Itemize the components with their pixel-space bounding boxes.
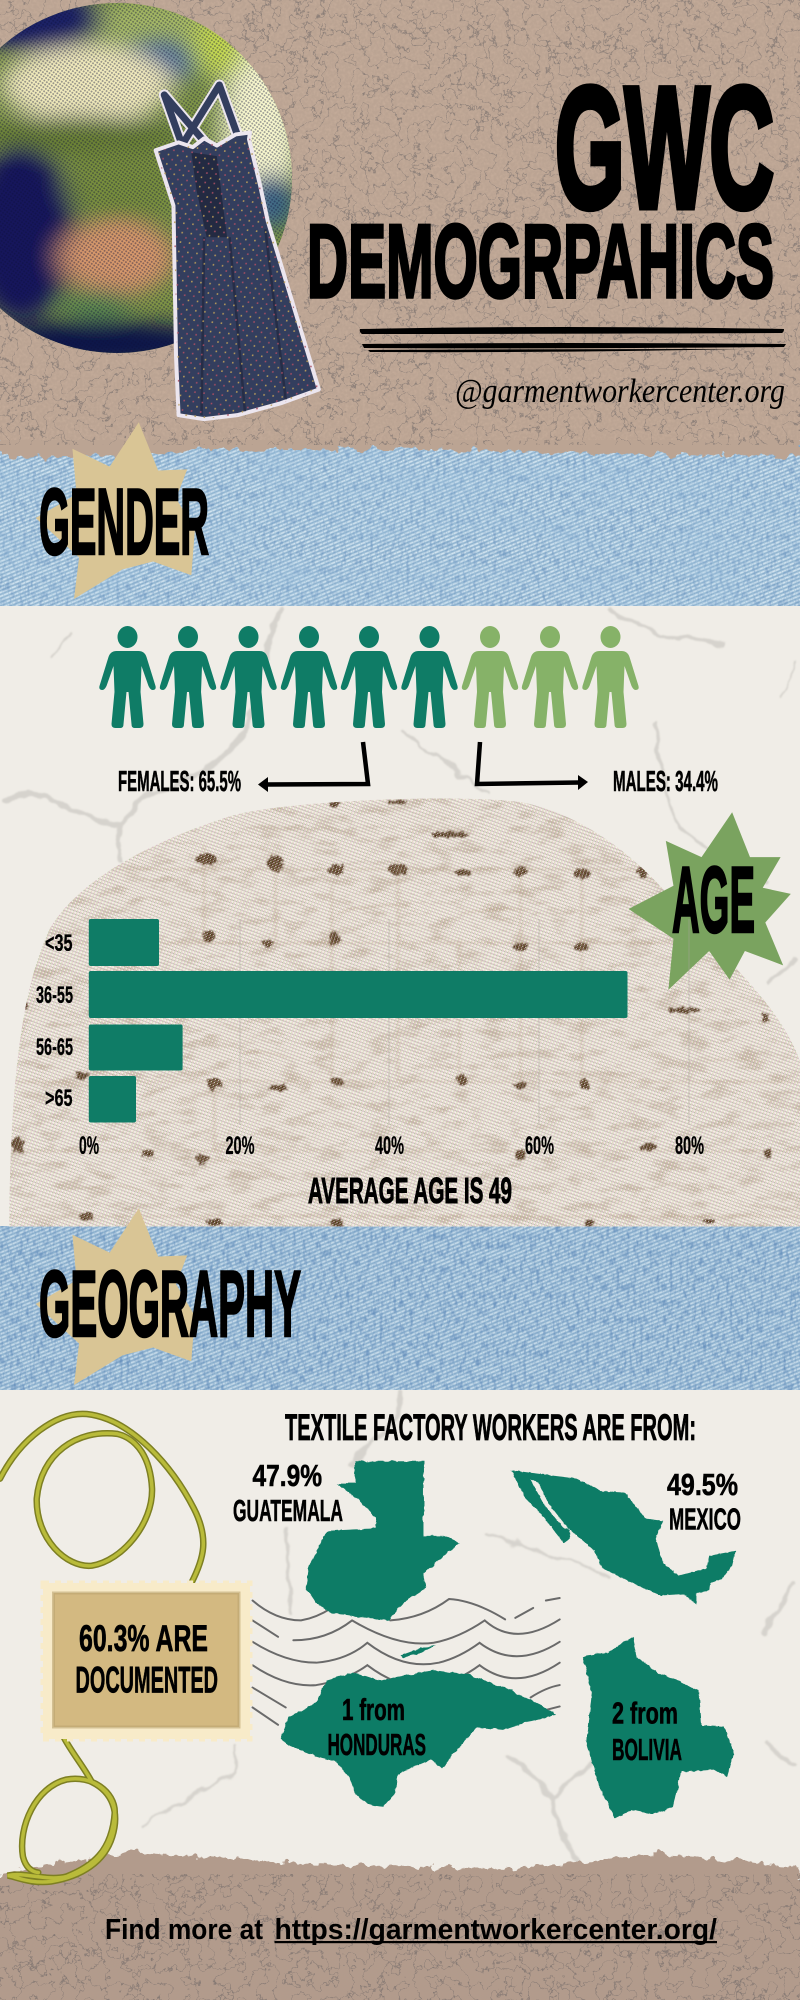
panel: denim band gender bbox=[0, 440, 800, 606]
stamp: documented: 60.3% ARE bbox=[79, 1618, 208, 1659]
decorative postmark wave lines bbox=[253, 1598, 560, 1725]
icon: green starburst bbox=[629, 812, 791, 990]
text: GENDER bbox=[39, 469, 209, 574]
label: guatemala bbox=[233, 1458, 343, 1528]
category labels: 56-65 bbox=[36, 1034, 73, 1061]
axis labels: 80% bbox=[675, 1132, 704, 1160]
icon: tan starburst behind gender bbox=[36, 422, 195, 599]
label: honduras bbox=[328, 1692, 426, 1762]
category labels: <35 bbox=[45, 930, 72, 957]
stamp: documented bbox=[43, 1583, 250, 1739]
label: females: FEMALES: 65.5% bbox=[118, 766, 241, 798]
label: bolivia: BOLIVIA bbox=[612, 1732, 682, 1767]
decorative brush underline bbox=[360, 327, 786, 352]
axis labels: 60% bbox=[525, 1132, 554, 1160]
title bbox=[307, 52, 774, 320]
label: bolivia bbox=[612, 1696, 682, 1767]
image: halftone globe bbox=[0, 0, 301, 368]
arrow: females bbox=[258, 742, 368, 792]
label: mexico bbox=[667, 1467, 741, 1536]
text: GEOGRAPHY bbox=[39, 1251, 301, 1356]
bars bbox=[89, 919, 628, 1122]
footer: link: Find more at bbox=[105, 1914, 263, 1946]
heading: age bbox=[629, 812, 791, 990]
category labels: >65 bbox=[45, 1085, 72, 1112]
panel: denim band geography bbox=[0, 1226, 800, 1390]
axis labels bbox=[79, 1132, 704, 1160]
label: mexico: MEXICO bbox=[669, 1502, 741, 1536]
map: bolivia bbox=[583, 1637, 734, 1818]
icon: tan starburst behind geography bbox=[36, 1208, 195, 1385]
label: honduras: HONDURAS bbox=[328, 1727, 426, 1762]
map: guatemala bbox=[306, 1461, 459, 1620]
image: navy dress bbox=[156, 85, 319, 419]
map: mexico bbox=[511, 1470, 736, 1604]
callout: average age: AVERAGE AGE IS 49 bbox=[308, 1170, 512, 1211]
axis labels: 0% bbox=[79, 1132, 99, 1160]
label: mexico: 49.5% bbox=[667, 1467, 738, 1502]
stamp: documented: DOCUMENTED bbox=[76, 1660, 218, 1700]
chart: age bar chart bbox=[36, 919, 704, 1160]
axis labels: 40% bbox=[375, 1132, 404, 1160]
axis labels: 20% bbox=[226, 1132, 254, 1160]
category labels: 36-55 bbox=[36, 982, 73, 1009]
decorative green string bbox=[0, 1414, 203, 1882]
arrow: males bbox=[477, 742, 588, 790]
footer: link: https://garmentworkercenter.org/ bbox=[274, 1914, 717, 1946]
background: bottom torn kraft paper bbox=[0, 1852, 800, 2000]
label: guatemala: 47.9% bbox=[252, 1458, 322, 1493]
chart: gender pictogram of nine people bbox=[99, 626, 639, 728]
label: bolivia: 2 from bbox=[612, 1696, 678, 1730]
label: guatemala: GUATEMALA bbox=[233, 1493, 343, 1528]
category labels bbox=[36, 930, 73, 1112]
map: honduras bbox=[281, 1645, 556, 1807]
background: top torn kraft paper bbox=[0, 0, 800, 458]
panel: halftone brick dome bbox=[0, 790, 800, 1230]
label: honduras: 1 from bbox=[342, 1692, 405, 1727]
